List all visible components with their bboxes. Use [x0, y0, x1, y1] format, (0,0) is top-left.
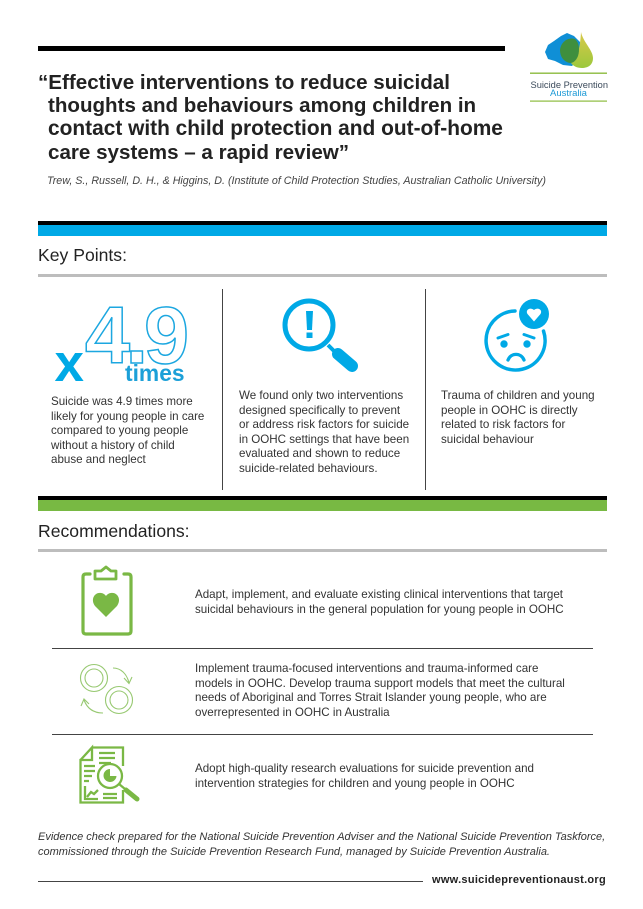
key point 2 text: We found only two interventions — [239, 389, 403, 402]
key points band — [38, 221, 607, 236]
icon: 4.9 times: 4 — [85, 291, 130, 381]
recommendation 2 text — [195, 662, 565, 718]
recommendation 3 text: Adopt high-quality research evaluations for suicide prevention and — [195, 762, 534, 775]
icon: 4.9 times — [54, 291, 189, 393]
recommendation 1 text: Adapt, implement, and evaluate existing clinical interventions that target — [195, 588, 563, 601]
key point 1 text: Suicide was 4.9 times more — [51, 395, 193, 408]
title: “Effective interventions to reduce suicidal — [38, 71, 450, 94]
website: www.suicidepreventionaust.org — [432, 874, 606, 886]
key point 2 text: evaluated and shown to reduce — [239, 447, 400, 460]
icon: magnifying glass with exclamation — [282, 298, 358, 372]
key point 3 text: related to risk factors for — [441, 418, 565, 431]
footer note — [38, 831, 605, 858]
key point 3 text — [441, 389, 595, 446]
key point 1 text: abuse and neglect — [51, 453, 146, 466]
key point 1 text: without a history of child — [51, 438, 175, 452]
icon: 4.9 times: . — [126, 291, 148, 381]
authors: Trew, S., Russell, D. H., & Higgins, D. (Institute of Child Protection Studies, Australian Catholic University) — [47, 175, 546, 187]
key point 2 text: or address risk factors for suicide — [239, 418, 409, 431]
key point 3 text: people in OOHC is directly — [441, 404, 578, 416]
icon: clipboard with heart — [81, 566, 133, 636]
footer note: Evidence check prepared for the National Suicide Prevention Adviser and the National Suicide Prevention Taskforce, — [38, 831, 605, 843]
icon: 4.9 times: 9 — [144, 291, 189, 381]
recommendation 3 text: intervention strategies for children and young people in OOHC — [195, 776, 515, 790]
recommendation 1 text — [195, 588, 564, 616]
key point 3 text: Trauma of children and young — [441, 389, 595, 402]
icon: 4.9 times: times — [125, 360, 185, 386]
key point 1 text: compared to young people — [51, 424, 188, 437]
icon: cycle of circles — [80, 664, 133, 714]
key point 2 text: in OOHC settings that have been — [239, 432, 409, 446]
top rule — [38, 46, 505, 51]
title: contact with child protection and out-of-home — [48, 117, 503, 140]
recommendation 2 text: Implement trauma-focused interventions and trauma-informed care — [195, 662, 538, 675]
footer note: commissioned through the Suicide Prevention Research Fund, managed by Suicide Prevention Australia. — [38, 846, 550, 858]
recommendation 3 text — [195, 762, 534, 790]
logo: Suicide Prevention Australia: Australia — [550, 88, 588, 99]
title: thoughts and behaviours among children in — [48, 94, 476, 117]
heading: Key Points: Key Points: — [38, 245, 127, 265]
key point 2 text: suicide-related behaviours. — [239, 462, 378, 474]
icon: 4.9 times: x — [54, 334, 84, 393]
title — [38, 71, 503, 164]
icon: sad face with heart — [484, 299, 549, 372]
key point 2 text — [239, 389, 409, 474]
icon: document with magnifier — [79, 744, 140, 804]
heading: Recommendations: Recommendations: — [38, 521, 190, 541]
title: care systems – a rapid review” — [48, 141, 349, 164]
recommendation 1 text: suicidal behaviours in the general population for young people in OOHC — [195, 602, 564, 616]
recommendation 2 text: models in OOHC. Develop trauma support models that meet the cultural — [195, 676, 565, 690]
logo: Suicide Prevention Australia: Suicide Prevention — [530, 80, 608, 90]
key point 2 text: designed specifically to prevent — [239, 404, 400, 416]
key point 1 text — [51, 395, 204, 466]
key point 3 text: suicidal behaviour — [441, 432, 534, 446]
key point 1 text: likely for young people in care — [51, 410, 204, 422]
recommendation 2 text: overrepresented in OOHC in Australia — [195, 706, 390, 718]
logo: Suicide Prevention Australia — [530, 32, 608, 102]
recommendation 2 text: needs of Aboriginal and Torres Strait Islander young people, who are — [195, 691, 547, 704]
recommendations band — [38, 496, 607, 511]
